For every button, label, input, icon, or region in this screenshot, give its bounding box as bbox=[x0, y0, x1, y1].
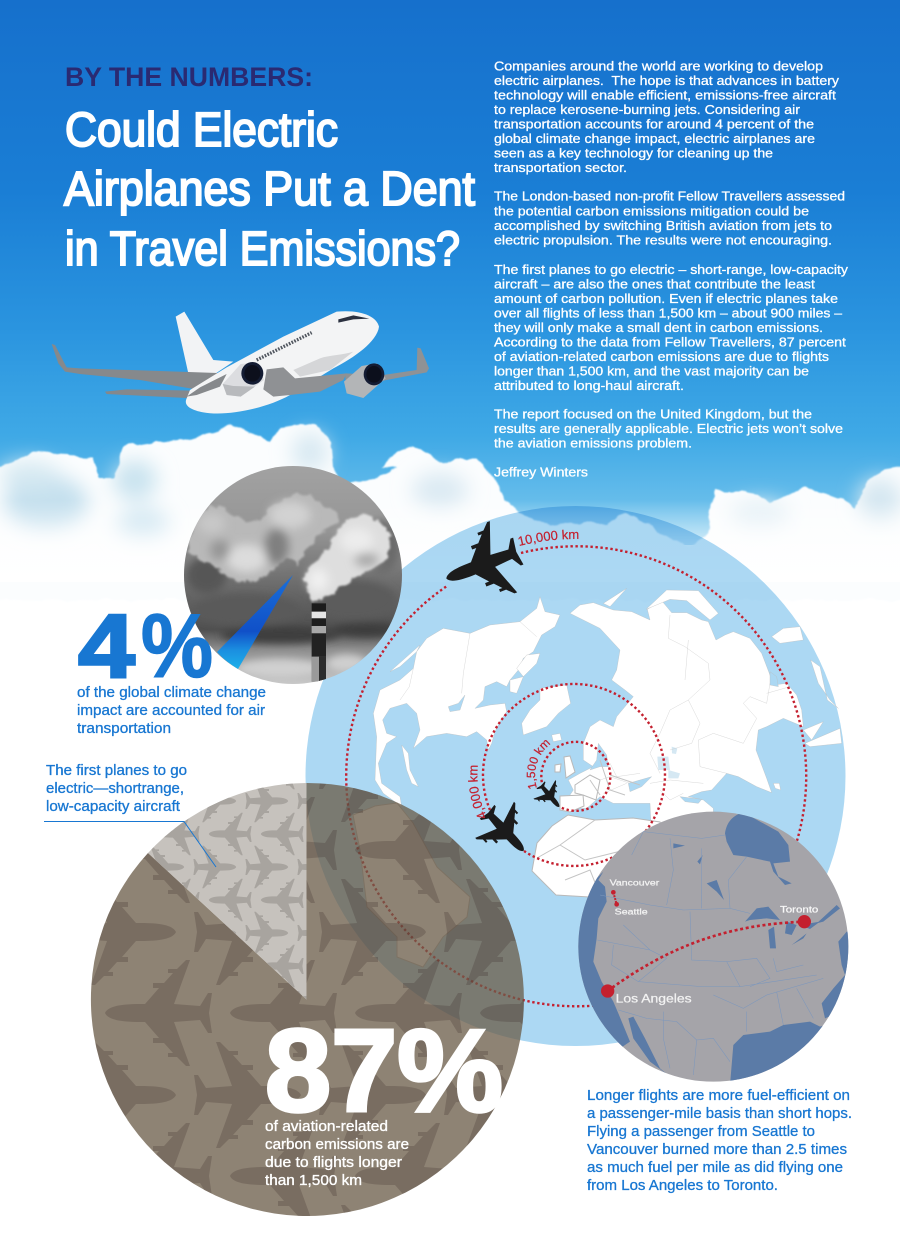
text: fuel efficiency: from Los Angeles to Toronto. bbox=[587, 1178, 778, 1194]
paragraph 3 bbox=[494, 262, 848, 393]
paragraph 2 bbox=[494, 189, 845, 247]
city dot: Los Angeles bbox=[601, 984, 614, 998]
far wing stabilizer bbox=[105, 389, 195, 398]
Africa bbox=[532, 815, 670, 900]
kicker: BY THE NUMBERS: bbox=[65, 62, 313, 92]
plane pattern on small slice bbox=[148, 783, 306, 1000]
water and boundaries bbox=[570, 812, 857, 1085]
windows bbox=[257, 333, 312, 360]
paragraph 1: to replace kerosene-burning jets. Considering air bbox=[494, 102, 801, 117]
belly shading bbox=[293, 352, 353, 377]
callout text: The first planes to go bbox=[46, 763, 187, 779]
clouds bbox=[0, 423, 900, 600]
Eurasia bbox=[567, 588, 842, 840]
caption bbox=[265, 1119, 409, 1189]
map base bbox=[578, 812, 848, 1082]
paragraph 2: the potential carbon emissions mitigation could be bbox=[494, 203, 809, 218]
caption: transportation bbox=[77, 721, 171, 737]
paragraph 3: The first planes to go electric – short-range, low-capacity bbox=[494, 262, 848, 277]
long route bbox=[608, 922, 804, 991]
city dot: Seattle bbox=[614, 902, 619, 907]
paragraph 2: The London-based non-profit Fellow Travellers assessed bbox=[494, 189, 845, 204]
Western Europe bbox=[555, 756, 640, 812]
headline: Airplanes Put a Dent bbox=[64, 163, 475, 216]
text: fuel efficiency: Longer flights are more fuel-efficient on bbox=[587, 1088, 850, 1104]
label: 1,500 km: 1,500 km bbox=[526, 740, 550, 789]
short-haul slice bbox=[148, 783, 306, 1000]
paragraph 1: technology will enable efficient, emissions-free aircraft bbox=[494, 88, 836, 103]
paragraph 3: amount of carbon pollution. Even if electric planes take bbox=[494, 291, 838, 306]
stat: 4 percent bbox=[77, 597, 266, 737]
label: 4,000 km: 4,000 km bbox=[468, 766, 486, 818]
text: fuel efficiency: Vancouver burned more than 2.5 times bbox=[587, 1142, 847, 1158]
text: fuel efficiency: a passenger-mile basis than short hops. bbox=[587, 1106, 852, 1122]
headline bbox=[64, 104, 475, 276]
chimney bbox=[312, 603, 326, 682]
label: 10,000 km: 10,000 km bbox=[518, 530, 578, 546]
paragraph 1 bbox=[494, 59, 839, 175]
paragraph 3: longer than 1,500 km, and the vast majority can be bbox=[494, 364, 809, 378]
byline: Jeffrey Winters bbox=[494, 465, 588, 480]
text: fuel efficiency: Flying a passenger from Seattle to bbox=[587, 1124, 815, 1140]
lower wing root bbox=[187, 374, 227, 397]
globe disc bbox=[306, 506, 846, 1046]
paragraph 3: they will only make a small dent in carbon emissions. bbox=[494, 320, 823, 335]
big number: 87% bbox=[265, 1005, 503, 1136]
label: Toronto: Toronto bbox=[780, 904, 818, 914]
land masses bbox=[353, 588, 842, 967]
Atlantic bbox=[822, 932, 848, 1018]
Gulf of California bbox=[628, 1016, 666, 1073]
caption: of the global climate change bbox=[77, 685, 266, 701]
paragraph 3: According to the data from Fellow Travellers, 87 percent bbox=[494, 334, 846, 350]
left wing bbox=[52, 344, 228, 390]
paragraph 4: The report focused on the United Kingdom, but the bbox=[494, 407, 812, 422]
plane pattern on large slice bbox=[91, 783, 524, 1216]
right engine bbox=[344, 363, 386, 398]
paragraph 1: seen as a key technology for cleaning up the bbox=[494, 146, 773, 161]
caption: of aviation-related bbox=[265, 1119, 388, 1135]
1,500 km ring bbox=[541, 742, 610, 811]
North America bbox=[373, 597, 571, 807]
87 percent slice bbox=[91, 783, 524, 1216]
North America route map bbox=[570, 812, 857, 1085]
paragraph 4 bbox=[494, 407, 843, 451]
blue slice marker bbox=[217, 575, 293, 669]
callout: first planes bbox=[44, 763, 216, 867]
caption: impact are accounted for air bbox=[77, 703, 265, 719]
airliner illustration bbox=[52, 311, 429, 413]
right wing bbox=[345, 348, 429, 392]
icon: short haul plane bbox=[530, 776, 570, 816]
South America bbox=[353, 803, 470, 967]
headline: Could Electric bbox=[65, 104, 338, 157]
paragraph 3: attributed to long-haul aircraft. bbox=[494, 378, 684, 393]
pie chart bbox=[91, 783, 524, 1216]
paragraph 1: transportation accounts for around 4 percent of the bbox=[494, 117, 814, 132]
caption: due to flights longer bbox=[265, 1155, 402, 1171]
paragraph 2: accomplished by switching British aviation from jets to bbox=[494, 218, 832, 233]
big number 4: 4 bbox=[78, 597, 135, 697]
left engine bbox=[223, 362, 264, 397]
label: Los Angeles: Los Angeles bbox=[616, 992, 692, 1006]
fuselage bbox=[186, 311, 379, 413]
caption: than 1,500 km bbox=[265, 1173, 362, 1189]
icon: long haul plane bbox=[433, 515, 532, 614]
photo background bbox=[184, 466, 402, 684]
city dot: Toronto bbox=[798, 915, 811, 928]
plume shading bbox=[308, 528, 379, 591]
caption bbox=[77, 685, 266, 737]
smokestack photo circle bbox=[184, 466, 402, 684]
label: Vancouver: Vancouver bbox=[610, 877, 659, 887]
text: fuel efficiency bbox=[587, 1088, 852, 1194]
paragraph 1: Companies around the world are working to develop bbox=[494, 59, 823, 74]
cockpit bbox=[338, 315, 369, 323]
Pacific bbox=[578, 872, 630, 1046]
city dot: Vancouver bbox=[611, 890, 616, 895]
callout text: electric—shortrange, bbox=[46, 781, 184, 797]
globe panel bbox=[306, 506, 846, 1046]
smoke plume bbox=[304, 516, 391, 602]
percent sign: % bbox=[141, 597, 213, 697]
caption: carbon emissions are bbox=[265, 1137, 409, 1153]
Hudson Bay bbox=[725, 812, 792, 885]
paragraph 1: electric airplanes. The hope is that advances in battery bbox=[494, 73, 839, 88]
paragraph 1: transportation sector. bbox=[494, 160, 627, 175]
paragraph 2: electric propulsion. The results were not encouraging. bbox=[494, 232, 832, 247]
Gulf of Mexico bbox=[730, 1022, 823, 1081]
dark smoke bbox=[187, 520, 400, 678]
cloud shading bbox=[198, 502, 311, 572]
headline: in Travel Emissions? bbox=[65, 223, 460, 276]
paragraph 4: results are generally applicable. Electric jets won’t solve bbox=[494, 421, 843, 436]
title block bbox=[64, 62, 475, 276]
paragraph 1: global climate change impact, electric airplanes are bbox=[494, 131, 815, 146]
wing root bbox=[263, 367, 347, 397]
short route bbox=[613, 892, 617, 904]
paragraph 3: over all flights of less than 1,500 km – about 900 miles – bbox=[494, 306, 843, 320]
10,000 km ring bbox=[346, 546, 806, 1006]
paragraph 3: of aviation-related carbon emissions are due to flights bbox=[494, 349, 829, 364]
paragraph 4: the aviation emissions problem. bbox=[494, 436, 692, 451]
4,000 km ring bbox=[483, 684, 665, 866]
stat: 87 percent bbox=[265, 1005, 503, 1189]
icon: medium haul plane bbox=[468, 794, 543, 869]
callout text: low-capacity aircraft bbox=[46, 799, 180, 815]
sky background bbox=[0, 0, 900, 545]
tail fin bbox=[176, 312, 233, 375]
label: Seattle: Seattle bbox=[615, 907, 648, 917]
paragraph 3: aircraft – are also the ones that contribute the least bbox=[494, 276, 815, 292]
text: fuel efficiency: as much fuel per mile as did flying one bbox=[587, 1160, 843, 1176]
range rings bbox=[346, 546, 806, 1006]
grey clouds bbox=[189, 495, 337, 582]
borders bbox=[597, 832, 823, 1075]
article text bbox=[494, 59, 848, 480]
leader line bbox=[44, 822, 216, 867]
callout text bbox=[46, 763, 187, 815]
lakes bbox=[673, 843, 840, 948]
